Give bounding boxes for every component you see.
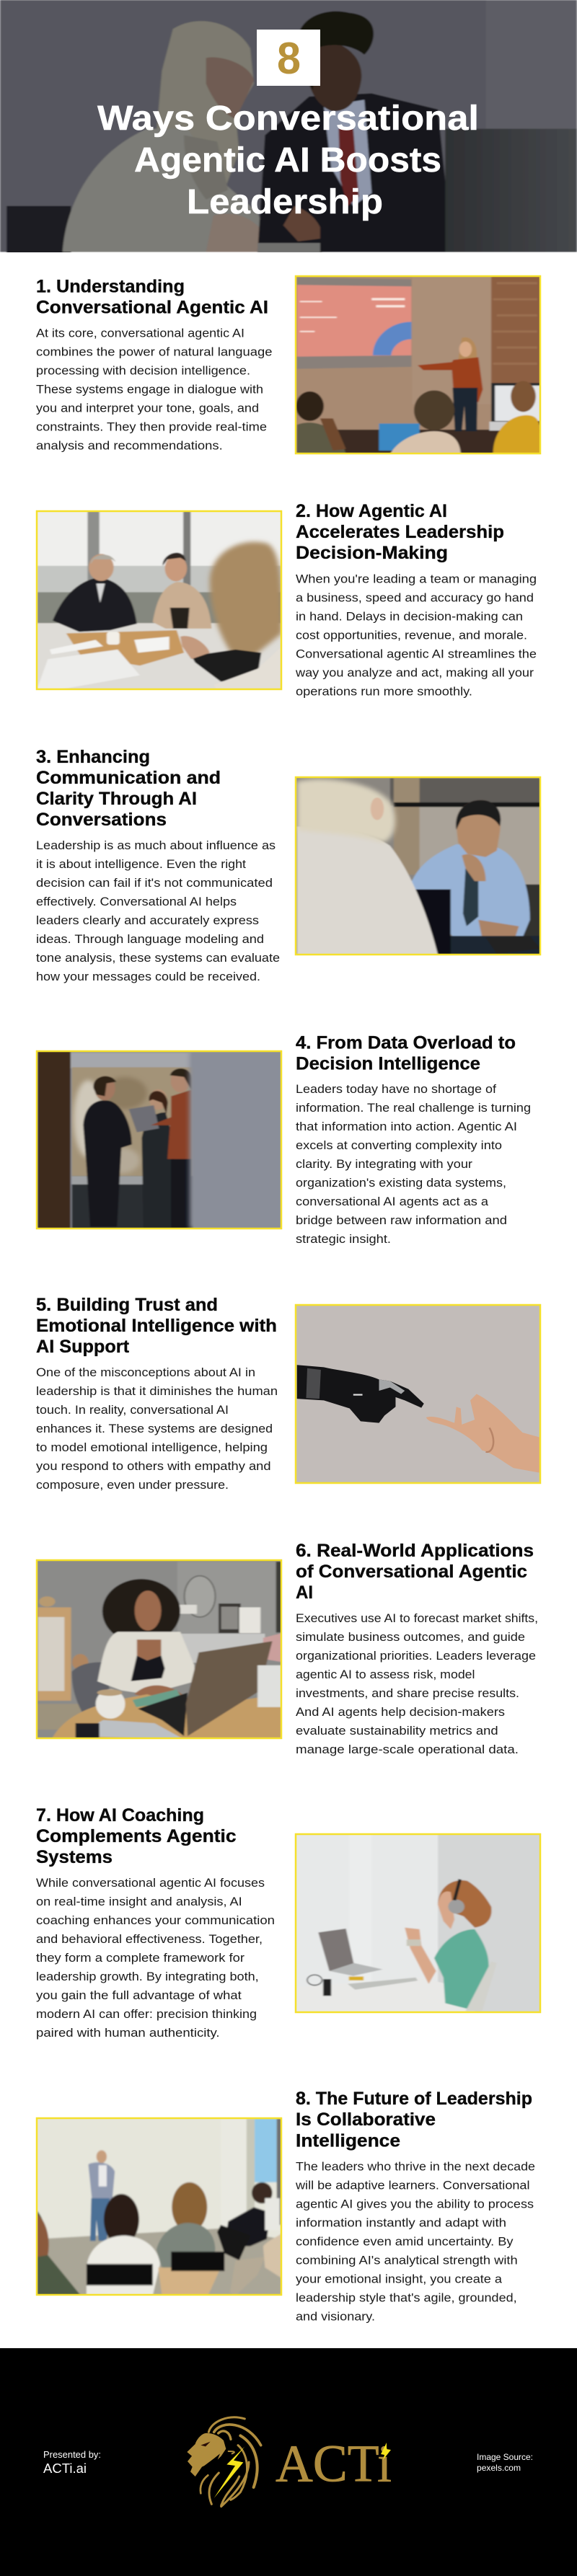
body 2: way you analyze and act, making all your	[295, 666, 534, 679]
heading 8: Is Collaborative	[296, 2110, 436, 2130]
body 3: effectively. Conversational AI helps	[36, 895, 237, 908]
image source: pexels.com	[477, 2463, 521, 2473]
body 5: enhances it. These systems are designed	[36, 1422, 273, 1435]
heading 5: AI Support	[36, 1337, 130, 1357]
body 6: Executives use AI to forecast market shifts,	[296, 1612, 538, 1625]
body 6: evaluate sustainability metrics and	[296, 1725, 498, 1738]
body 6: simulate business outcomes, and guide	[296, 1631, 525, 1644]
heading 2: 2. How Agentic AI	[296, 501, 447, 521]
body 1: analysis and recommendations.	[36, 440, 223, 453]
body 5: leadership is that it diminishes the human	[36, 1385, 278, 1398]
heading 7: Complements Agentic	[36, 1826, 237, 1846]
body 6: agentic AI to assess risk, model	[296, 1668, 475, 1681]
heading 8	[296, 2089, 532, 2151]
body 6: manage large-scale operational data.	[296, 1743, 519, 1756]
body 3: leaders clearly and accurately express	[36, 914, 259, 927]
photo: robot hand reaching human hand	[295, 1304, 541, 1484]
body 8: leadership style that's agile, grounded,	[296, 2291, 517, 2304]
body 1: At its core, conversational agentic AI	[36, 327, 245, 340]
photo: executives at meeting table	[36, 510, 282, 690]
body 2: When you're leading a team or managing	[296, 572, 537, 585]
body 8: will be adaptive learners. Conversational	[295, 2179, 529, 2192]
heading 6: AI	[296, 1583, 313, 1603]
heading 2	[296, 501, 504, 563]
body 5: to model emotional intelligence, helping	[36, 1441, 268, 1454]
body 4	[296, 1083, 531, 1246]
body 6: investments, and share precise results.	[296, 1687, 519, 1700]
heading 5: Emotional Intelligence with	[36, 1316, 277, 1336]
section 8	[36, 2089, 535, 2323]
heading 1	[36, 277, 268, 317]
body 5: touch. In reality, conversational AI	[36, 1404, 229, 1417]
heading 8: Intelligence	[296, 2131, 400, 2151]
heading 7: Systems	[36, 1847, 113, 1867]
body 7: they form a complete framework for	[36, 1952, 245, 1965]
logo: lion with lightning bolt	[187, 2417, 261, 2507]
heading 5	[36, 1295, 277, 1357]
heading 7: 7. How AI Coaching	[36, 1805, 204, 1825]
image source: Image Source:	[477, 2452, 533, 2462]
heading 8: 8. The Future of Leadership	[296, 2089, 532, 2109]
section 2	[36, 501, 537, 698]
presented by	[43, 2449, 101, 2476]
body 5	[36, 1366, 278, 1492]
body 1: combines the power of natural language	[36, 346, 273, 359]
body 8: your emotional insight, you create a	[296, 2272, 503, 2285]
heading 2: Accelerates Leadership	[296, 522, 504, 542]
heading 6: 6. Real-World Applications	[296, 1541, 534, 1561]
heading 5: 5. Building Trust and	[36, 1295, 218, 1315]
title: Agentic AI Boosts	[134, 141, 441, 180]
body 3: how your messages could be received.	[36, 970, 260, 983]
heading 1: 1. Understanding	[36, 277, 185, 297]
body 5: One of the misconceptions about AI in	[36, 1366, 255, 1379]
section 6	[36, 1541, 538, 1756]
body 4: bridge between raw information and	[296, 1214, 507, 1227]
body 4: information. The real challenge is turning	[296, 1102, 531, 1115]
body 3: it is about intelligence. Even the right	[36, 858, 246, 871]
body 2: Conversational agentic AI streamlines the	[296, 647, 537, 660]
body 6: organizational priorities. Leaders leverage	[296, 1650, 536, 1663]
body 3: Leadership is as much about influence as	[36, 839, 276, 852]
body 7: coaching enhances your communication	[36, 1914, 275, 1927]
body 1: constraints. They then provide real-time	[36, 421, 267, 434]
body 1: you and interpret your tone, goals, and	[36, 402, 259, 415]
body 7: leadership growth. By integrating both,	[36, 1970, 259, 1983]
body 7: and behavioral effectiveness. Together,	[36, 1933, 263, 1946]
body 6: And AI agents help decision-makers	[296, 1706, 505, 1719]
body 2: operations run more smoothly.	[296, 685, 472, 698]
body 4: excels at converting complexity into	[296, 1139, 502, 1152]
photo: woman with headset at laptop	[295, 1833, 541, 2013]
body 6	[296, 1612, 538, 1756]
body 4: Leaders today have no shortage of	[296, 1083, 496, 1096]
photo: speaker and seated audience	[36, 2117, 282, 2296]
body 1: processing with decision intelligence.	[36, 365, 250, 378]
body 2: a business, speed and accuracy go hand	[296, 591, 534, 604]
section 3	[36, 747, 541, 983]
body 8: information instantly and adapt with	[296, 2216, 506, 2229]
heading 3: Conversations	[36, 810, 167, 830]
body 7	[36, 1877, 275, 2040]
body 8: agentic AI gives you the ability to process	[296, 2197, 534, 2210]
body 2: in hand. Delays in decision-making can	[296, 610, 523, 623]
photo: three colleagues by window	[36, 1050, 282, 1229]
title	[97, 99, 479, 221]
body 7: modern AI can offer: precision thinking	[36, 2008, 257, 2021]
body 7: on real-time insight and analysis, AI	[36, 1895, 242, 1908]
presented by: Presented by:	[43, 2449, 101, 2460]
heading 2: Decision-Making	[296, 543, 448, 563]
heading 3	[36, 747, 221, 830]
heading 6: of Conversational Agentic	[296, 1562, 527, 1582]
body 4: strategic insight.	[296, 1233, 391, 1246]
body 4: conversational AI agents act as a	[296, 1195, 489, 1208]
photo: man listening across desk	[295, 776, 541, 955]
body 7: paired with human authenticity.	[36, 2027, 220, 2040]
section 5	[36, 1295, 541, 1492]
section 7	[36, 1805, 541, 2040]
body 2: cost opportunities, revenue, and morale.	[296, 629, 527, 642]
hero photo: two colleagues at laptop	[0, 0, 577, 254]
body 8	[295, 2160, 535, 2323]
body 4: that information into action. Agentic AI	[296, 1120, 517, 1133]
number badge	[257, 30, 320, 86]
body 3: tone analysis, these systems can evaluate	[36, 952, 280, 965]
footer	[0, 2348, 577, 2576]
body 1: These systems engage in dialogue with	[36, 384, 263, 397]
body 8: confidence even amid uncertainty. By	[296, 2235, 514, 2248]
heading 3: Communication and	[36, 768, 221, 788]
title: Ways Conversational	[97, 99, 479, 138]
body 1	[36, 327, 273, 453]
body 3: ideas. Through language modeling and	[36, 933, 264, 946]
heading 3: 3. Enhancing	[36, 747, 150, 767]
heading 3: Clarity Through AI	[36, 789, 197, 809]
presented by: ACTi.ai	[43, 2461, 87, 2476]
body 4: organization's existing data systems,	[296, 1177, 506, 1190]
heading 7	[36, 1805, 237, 1867]
body 7: While conversational agentic AI focuses	[36, 1877, 265, 1890]
heading 4: Decision Intelligence	[296, 1054, 480, 1074]
title: Leadership	[187, 183, 383, 221]
heading 4: 4. From Data Overload to	[296, 1032, 516, 1053]
section 1	[36, 275, 541, 454]
body 8: combining AI's analytical strength with	[296, 2254, 518, 2267]
body 8: The leaders who thrive in the next decade	[296, 2160, 535, 2173]
body 2	[295, 572, 537, 698]
photo: presenter at projection screen	[295, 275, 541, 454]
photo: woman working on laptop	[36, 1559, 282, 1739]
body 5: you respond to others with empathy and	[36, 1460, 271, 1473]
body 3: decision can fail if it's not communicated	[36, 877, 273, 890]
body 3	[36, 839, 280, 983]
logo wordmark: ACTi	[276, 2434, 392, 2493]
heading 1: Conversational Agentic AI	[36, 297, 268, 317]
section 4	[36, 1032, 531, 1246]
number badge: 8	[277, 34, 301, 84]
heading 6	[296, 1541, 534, 1603]
body 4: clarity. By integrating with your	[296, 1158, 473, 1171]
image source	[477, 2452, 533, 2473]
body 7: you gain the full advantage of what	[36, 1989, 242, 2002]
hero banner	[0, 0, 577, 254]
heading 4	[296, 1032, 516, 1074]
body 8: and visionary.	[296, 2310, 375, 2323]
body 5: composure, even under pressure.	[36, 1479, 229, 1492]
